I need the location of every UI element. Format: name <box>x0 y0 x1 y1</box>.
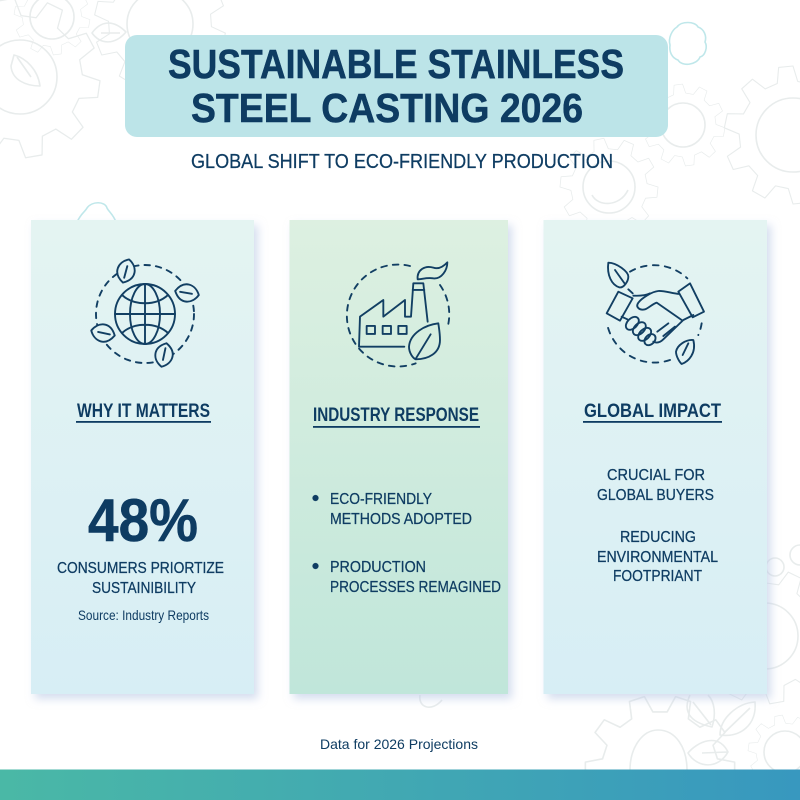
statistic: 48%: 48% <box>88 487 198 554</box>
text: crucial for global buyers: CRUCIAL FOR <box>607 467 705 484</box>
footer gradient bar <box>0 770 800 800</box>
source note: Source: Industry Reports <box>78 607 209 623</box>
heading: industry response: INDUSTRY RESPONSE <box>313 405 479 426</box>
title: SUSTAINABLE STAINLESS <box>168 41 624 87</box>
icon: factory with leaf <box>347 262 449 367</box>
bullet: production processes <box>312 559 501 596</box>
statistic label: SUSTAINIBILITY <box>92 580 196 597</box>
panel: why it matters <box>31 220 254 694</box>
text: crucial for global buyers <box>597 467 714 504</box>
bullet: eco-friendly methods: ECO-FRIENDLY <box>330 491 432 508</box>
title banner <box>125 35 668 137</box>
panel: global impact <box>544 220 767 694</box>
heading: global impact: GLOBAL IMPACT <box>584 401 721 422</box>
icon: globe with leaves <box>89 257 200 369</box>
text: reducing environmental footprint: REDUCING <box>620 529 696 546</box>
text: reducing environmental footprint <box>597 529 718 585</box>
title <box>168 41 624 131</box>
text: reducing environmental footprint: FOOTPRIANT <box>613 568 702 585</box>
bullet: eco-friendly methods: METHODS ADOPTED <box>330 511 472 528</box>
bullet: eco-friendly methods <box>312 491 472 528</box>
bullet: production processes: PROCESSES REMAGINED <box>330 579 501 596</box>
footer note: Data for 2026 Projections <box>320 736 478 752</box>
panel: industry response <box>290 220 508 694</box>
teal outline blobs <box>77 22 706 222</box>
icon: handshake with leaves <box>607 263 704 364</box>
heading: why it matters: WHY IT MATTERS <box>77 401 210 422</box>
text: reducing environmental footprint: ENVIRONMENTAL <box>597 549 718 566</box>
subtitle: GLOBAL SHIFT TO ECO-FRIENDLY PRODUCTION <box>191 150 613 173</box>
title: STEEL CASTING 2026 <box>191 85 583 131</box>
statistic label <box>57 560 224 597</box>
statistic label: CONSUMERS PRIORTIZE <box>57 560 224 577</box>
bullet: production processes: PRODUCTION <box>330 559 426 576</box>
text: crucial for global buyers: GLOBAL BUYERS <box>597 487 714 504</box>
